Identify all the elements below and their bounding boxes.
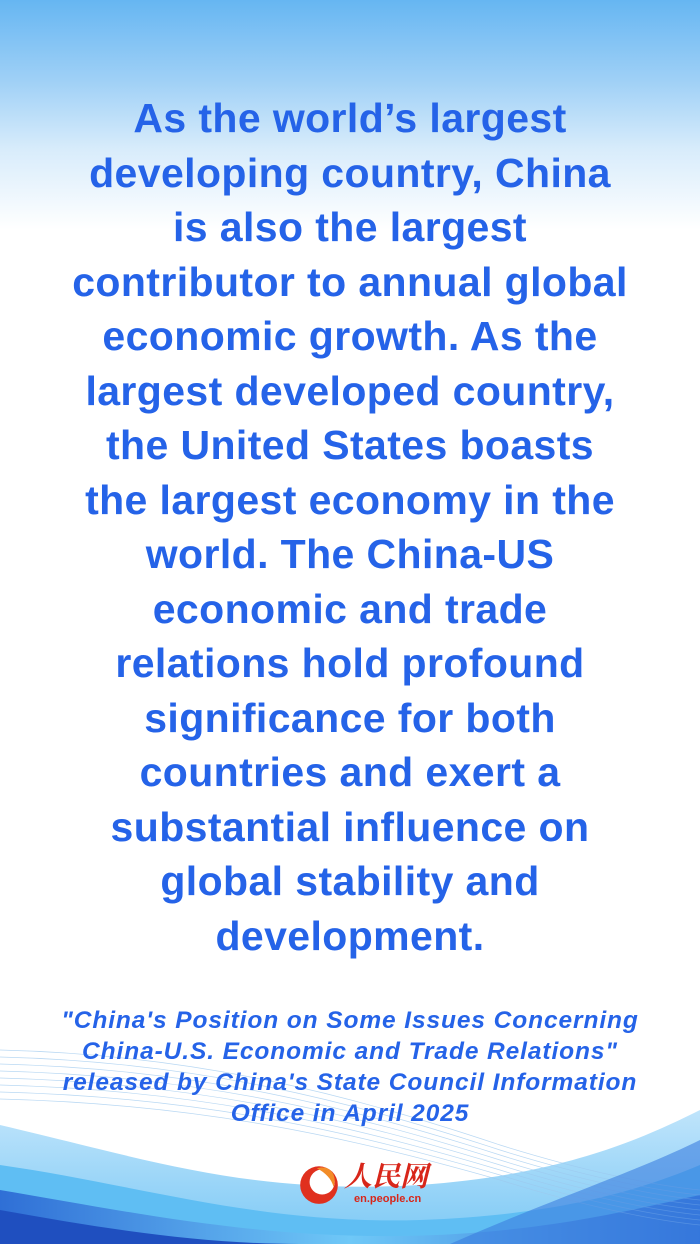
main quote text <box>72 95 628 958</box>
main quote text: As the world’s largest <box>133 95 567 141</box>
main quote text: world. The China-US <box>146 531 554 577</box>
background gradient <box>0 0 700 230</box>
main quote text: relations hold profound <box>115 640 585 686</box>
main quote text: development. <box>215 912 485 958</box>
main quote text: is also the largest <box>173 204 527 250</box>
main quote text: the largest economy in the <box>85 476 615 522</box>
main quote text: developing country, China <box>89 150 611 196</box>
bottom wave decoration <box>0 1050 700 1244</box>
citation source: "China's Position on Some Issues Concerning <box>61 1007 639 1034</box>
citation source: Office in April 2025 <box>231 1100 469 1127</box>
main quote text: substantial influence on <box>111 804 589 850</box>
logo text: 人民网 <box>344 1155 428 1195</box>
citation source <box>61 1007 639 1127</box>
citation source: released by China's State Council Information <box>63 1069 637 1096</box>
main quote text: countries and exert a <box>140 749 560 795</box>
main quote text: contributor to annual global <box>72 258 628 304</box>
main quote text: global stability and <box>160 858 540 904</box>
citation source: China-U.S. Economic and Trade Relations" <box>82 1038 618 1065</box>
main quote text: largest developed country, <box>85 368 615 414</box>
main quote text: economic and trade <box>153 586 547 632</box>
icon: logo swirl <box>300 1166 338 1204</box>
main quote text: significance for both <box>144 694 556 740</box>
main quote text: economic growth. As the <box>102 313 598 359</box>
logo: people's daily <box>300 1155 432 1205</box>
main quote text: the United States boasts <box>106 422 594 468</box>
logo: people's daily: en.people.cn <box>354 1193 421 1205</box>
